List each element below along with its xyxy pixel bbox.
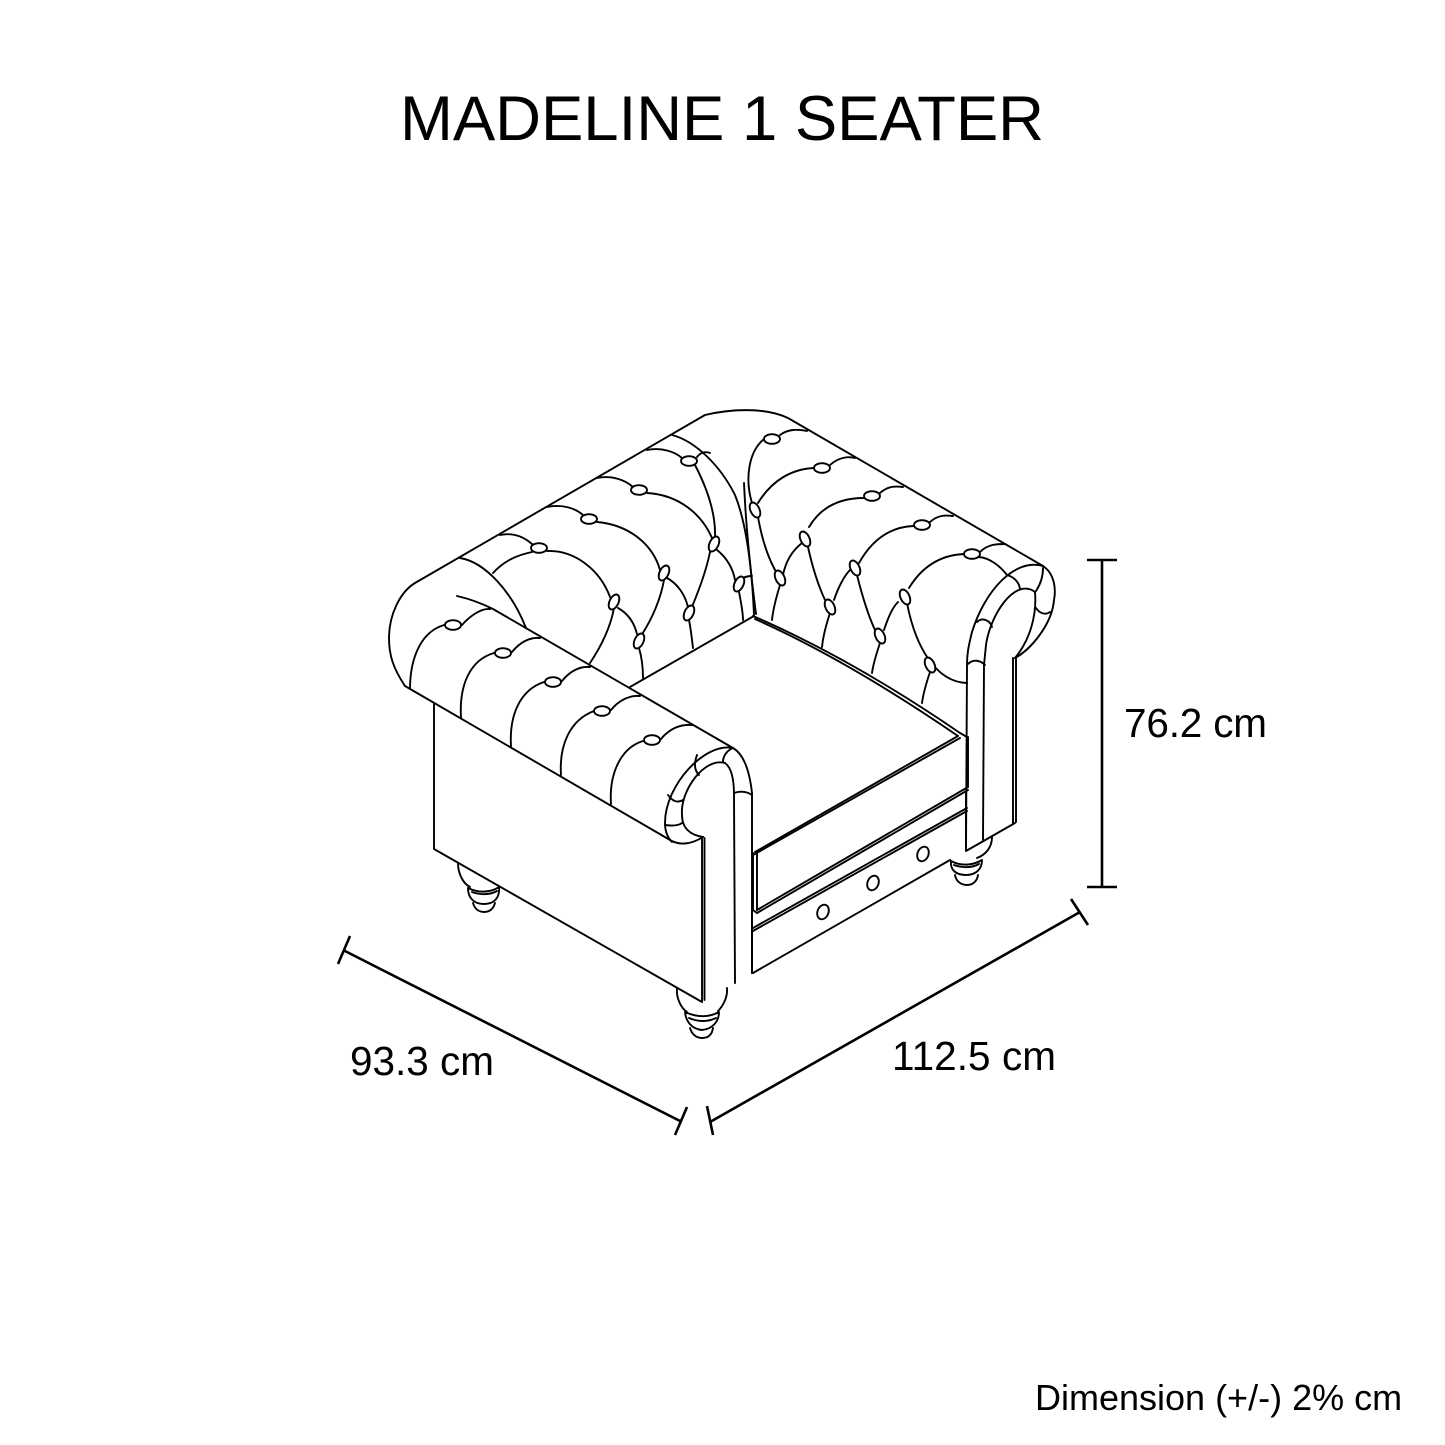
left arm buttons [445,620,461,630]
back tufting right [748,430,1007,703]
lower rail with studs [752,793,967,973]
rear right foot [951,837,992,885]
footnote: Dimension (+/-) 2% cm [1035,1377,1402,1418]
dimension: height 76.2 cm [1087,560,1117,887]
front left foot [677,988,727,1038]
left arm [405,596,733,844]
rear left foot [458,863,499,912]
dimension: width 112.5 cm [707,899,1088,1135]
left arm side panel and front scroll [434,704,752,1002]
back tufting buttons [531,434,980,674]
sofa line drawing [389,410,1055,1038]
sofa back outline [389,410,1043,687]
dimension: depth 93.3 cm [338,936,687,1135]
back tufting left [493,449,752,678]
label: depth: 93.3 cm [350,1038,494,1084]
right arm [966,565,1055,851]
label: width: 112.5 cm [892,1033,1056,1079]
label: height: 76.2 cm [1124,700,1267,746]
title: MADELINE 1 SEATER [400,84,1044,154]
seat cushion [753,616,968,913]
